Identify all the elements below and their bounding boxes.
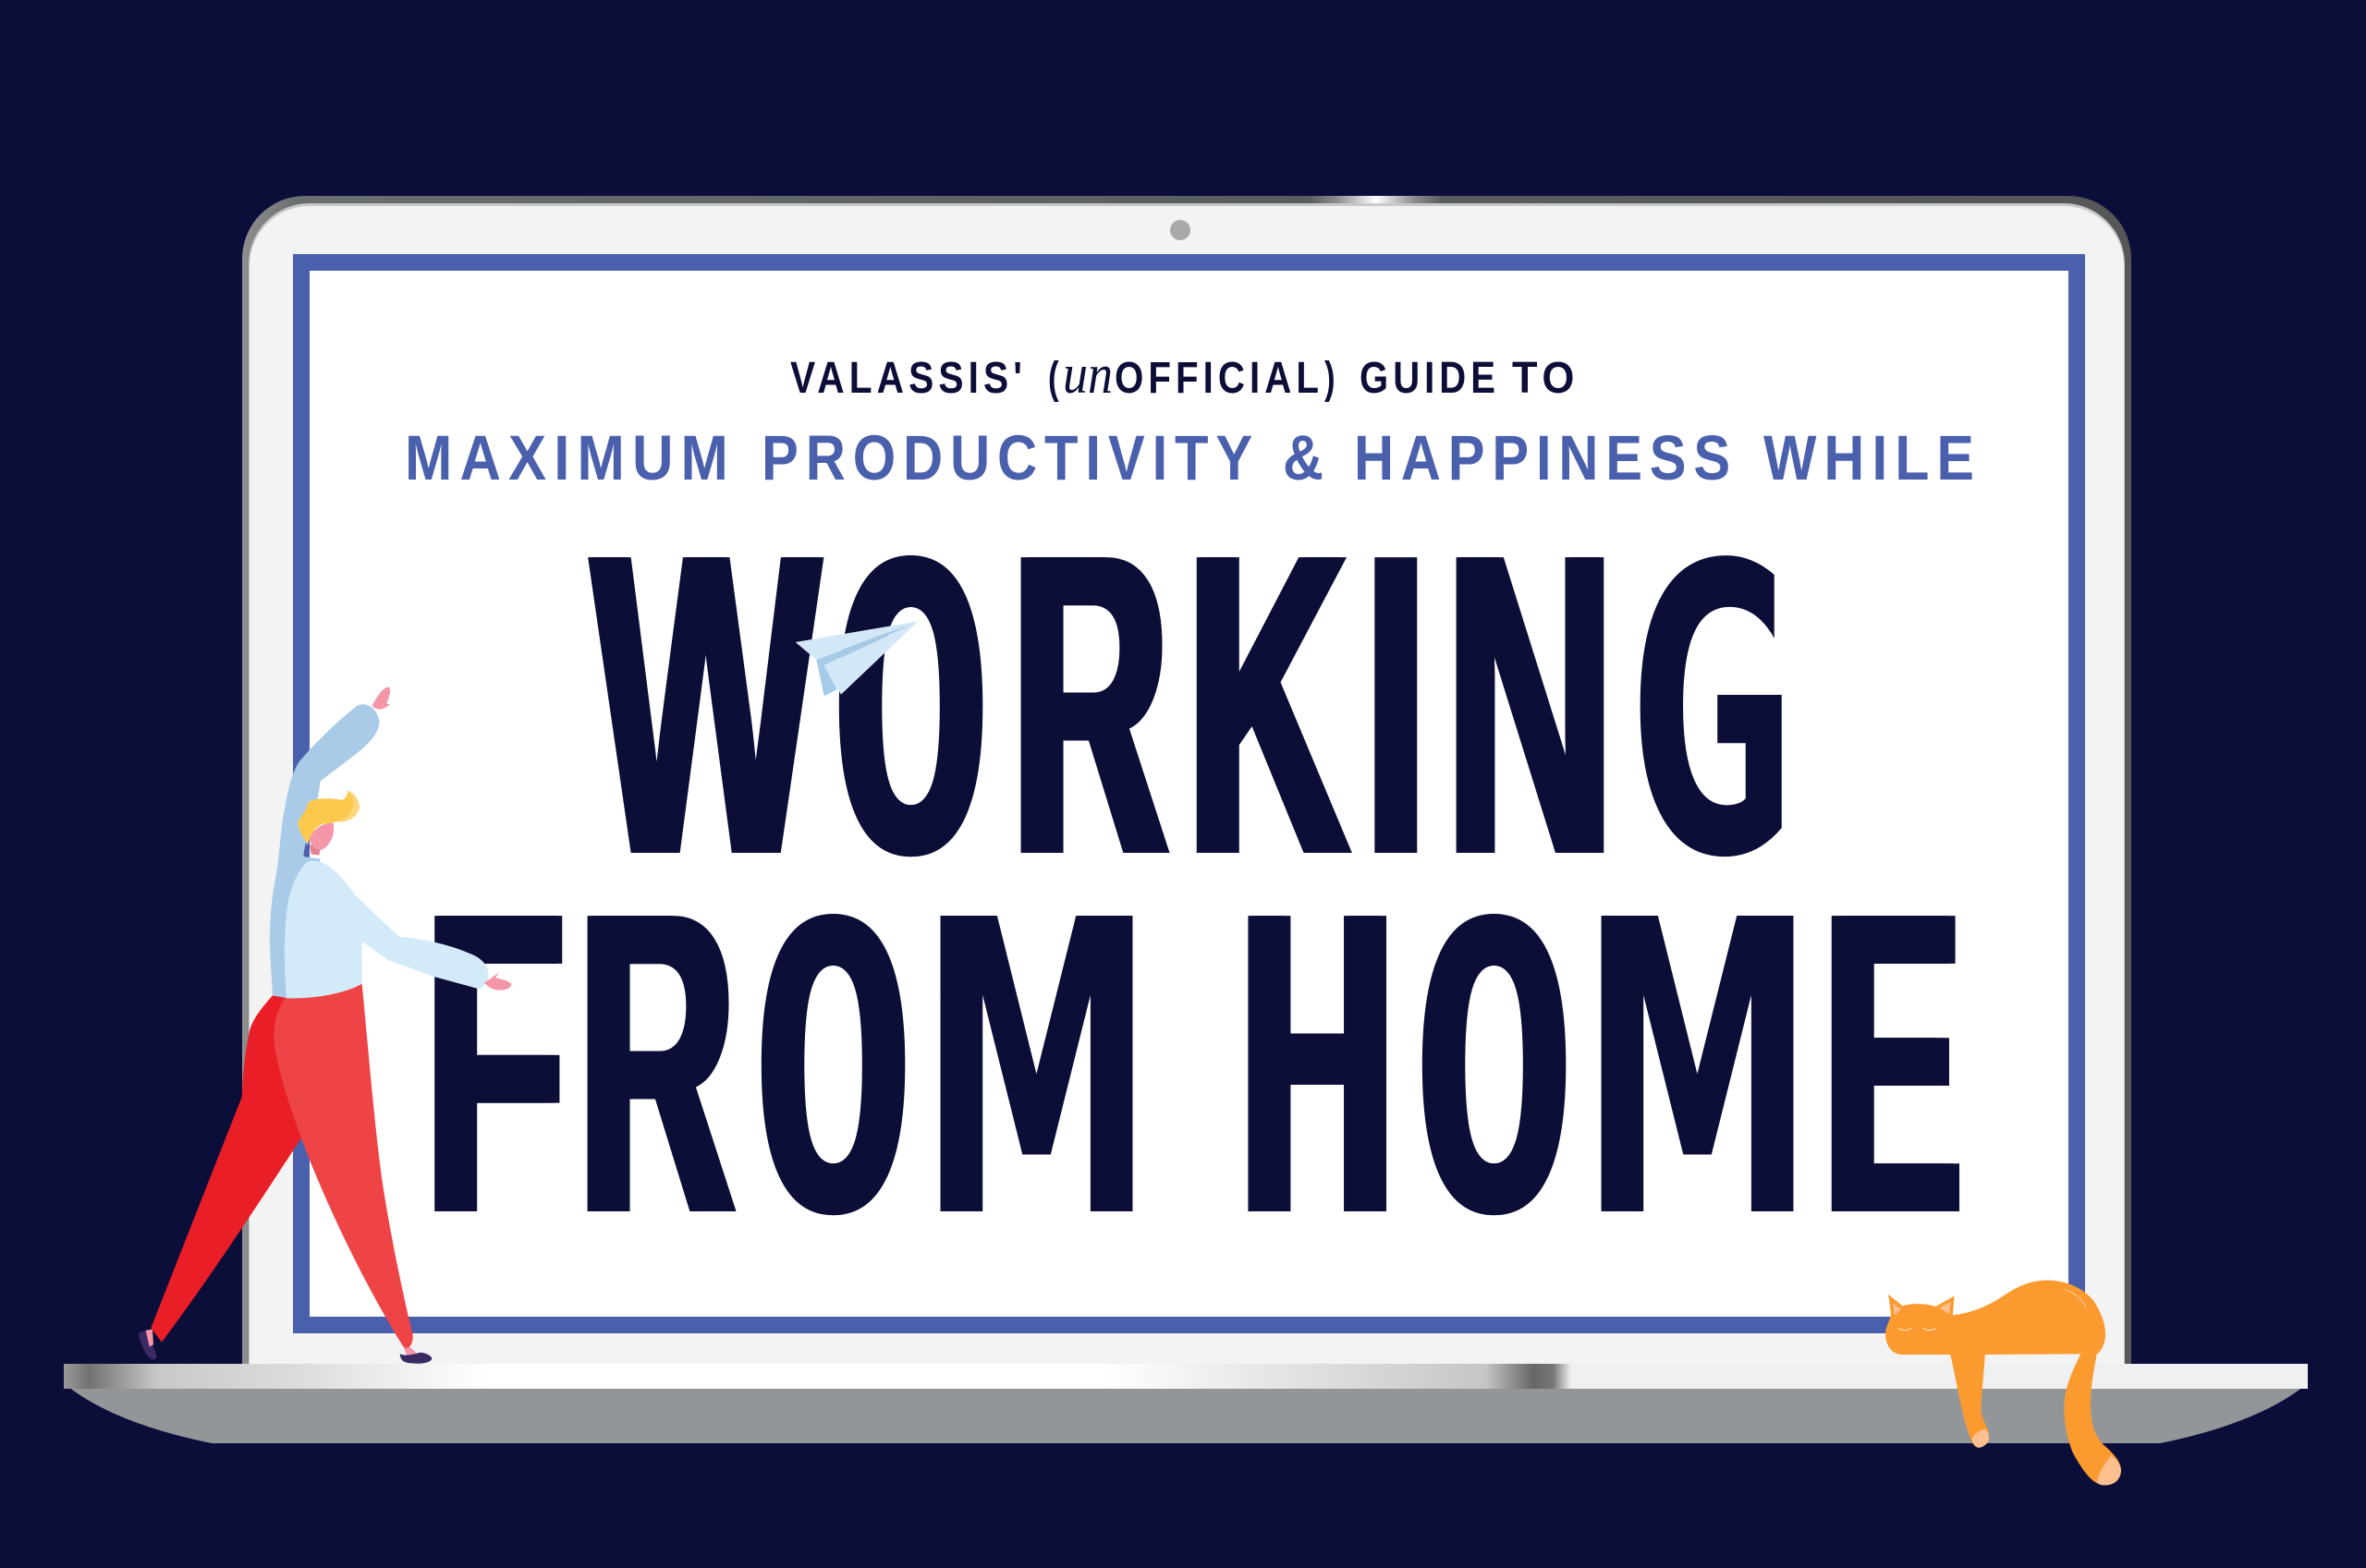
subtitle line: maximum productivity and happiness while: PRODUCTIVITY (762, 422, 1259, 493)
title line 1: WORKING: K (1187, 464, 1349, 944)
title line 1: WORKING: I (1355, 464, 1436, 944)
figure: person stretching (139, 687, 511, 1364)
intro line: Valassis' (unofficial) guide to: ( (1048, 354, 1063, 403)
laptop base (64, 1364, 2308, 1443)
title line 2: FROM HOME: O (1410, 840, 1578, 1304)
title line 1: WORKING: O (827, 481, 994, 945)
intro line: Valassis' (unofficial) guide to: un (1063, 344, 1113, 405)
screen with blue frame (301, 262, 2077, 1325)
front paw (1972, 1429, 1989, 1448)
title line 2: FROM HOME: H (1239, 822, 1395, 1303)
closed right eye (1923, 1328, 1936, 1331)
back hair (339, 791, 360, 822)
tail tip (2097, 1455, 2121, 1485)
subtitle line: maximum productivity and happiness while: HAPPINESS (1354, 422, 1738, 493)
intro line: Valassis' (unofficial) guide to: OFFICIAL (1115, 354, 1323, 403)
raised hand (372, 687, 390, 710)
back leg (151, 996, 302, 1343)
title line 1: WORKING: R (1011, 464, 1168, 944)
closed left eye (1898, 1328, 1911, 1331)
title line 2: FROM HOME: F (423, 822, 567, 1303)
title line 1: WORKING: G (1623, 481, 1796, 945)
neck (310, 845, 321, 856)
outstretched hand (484, 972, 511, 991)
subtitle line: maximum productivity and happiness while: & (1283, 422, 1331, 493)
figure: sleeping orange cat (1885, 1281, 2121, 1485)
back ankle (146, 1330, 153, 1347)
subtitle line: maximum productivity and happiness while: MAXIMUM (405, 422, 736, 493)
cat body, leg and tail (1885, 1281, 2121, 1485)
hair (298, 791, 353, 844)
title line 2: FROM HOME: O (749, 840, 917, 1304)
front shirt and outstretched arm (285, 860, 488, 998)
collar (303, 843, 310, 856)
front leg (274, 984, 413, 1348)
right ear inner (1940, 1302, 1951, 1314)
intro line: Valassis' (unofficial) guide to: GUIDE (1360, 354, 1500, 403)
title line 2: FROM HOME: R (579, 822, 735, 1303)
raised arm and back of shirt (270, 704, 380, 998)
front ankle (402, 1343, 419, 1356)
front shoe (400, 1353, 432, 1364)
title line 2: FROM HOME: M (1579, 835, 1815, 1307)
face (310, 823, 334, 849)
title line 2: FROM HOME: M (919, 835, 1154, 1307)
title line 1: WORKING: W (592, 464, 820, 944)
laptop lid (242, 196, 2131, 1364)
webcam (1170, 220, 1190, 240)
title line 2: FROM HOME: E (1824, 822, 1961, 1303)
title line 1: WORKING (588, 464, 1796, 945)
icon: paper plane (796, 621, 918, 696)
back highlight (2065, 1290, 2086, 1308)
left ear inner (1893, 1304, 1901, 1315)
subtitle line: maximum productivity and happiness while: WHILE (1763, 422, 1982, 493)
intro line: Valassis' (unofficial) guide to: TO (1512, 354, 1579, 403)
title line 1: WORKING: N (1445, 464, 1616, 944)
title line 2: FROM HOME (423, 822, 1961, 1307)
back shoe (139, 1331, 156, 1359)
intro line: Valassis' (unofficial) guide to: ) (1324, 354, 1339, 403)
intro line: Valassis' (unofficial) guide to: VALASSIS' (790, 354, 1027, 403)
